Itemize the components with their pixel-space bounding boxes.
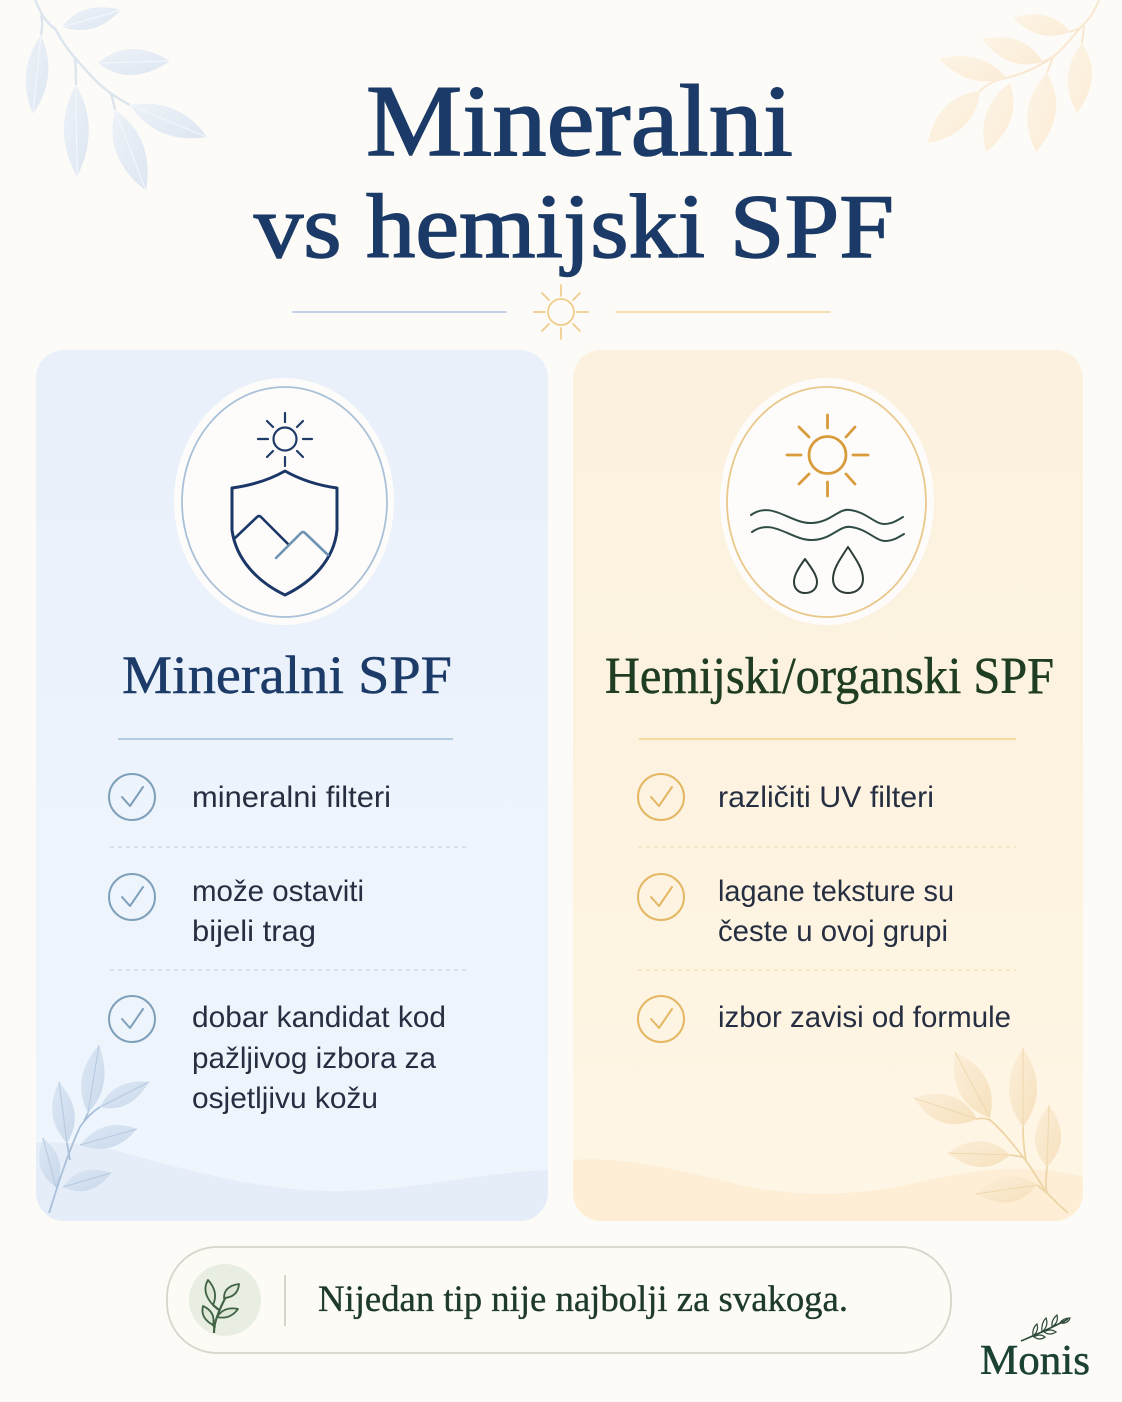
- panel background: [573, 350, 1083, 1221]
- heading rule: [639, 738, 1016, 740]
- panel background: [36, 350, 548, 1221]
- callout: bottom message: [167, 1247, 951, 1353]
- logo: Monis: [980, 1315, 1090, 1384]
- item: osjetljiva koža: [109, 996, 446, 1115]
- item: mineralni filteri: mineralni filteri: [192, 781, 391, 814]
- item: izbor zavisi od formule: [638, 996, 1011, 1042]
- item: mineralni filteri: [109, 774, 391, 820]
- item: osjetljiva koža: pažljivog izbora za: [192, 1042, 436, 1075]
- panel wave: [573, 1159, 1083, 1221]
- title: Mineralni: [366, 65, 793, 178]
- item: lagane teksture: česte u ovoj grupi: [718, 915, 948, 948]
- decorative sprig: top left: [26, 0, 207, 191]
- icon: green sprig: [189, 1264, 261, 1336]
- decorative sprig: panel left: [39, 1045, 149, 1213]
- item: izbor zavisi od formule: izbor zavisi od formule: [718, 1001, 1011, 1034]
- heading: Hemijski/organski SPF: [605, 648, 1054, 705]
- item: različiti UV filteri: [638, 774, 934, 820]
- title: [254, 65, 894, 277]
- heading rule: [118, 738, 453, 740]
- item: bijeli trag: bijeli trag: [192, 915, 316, 948]
- heading: Mineralni SPF: [122, 645, 452, 705]
- item: lagane teksture: lagane teksture su: [718, 875, 954, 908]
- logo text: Monis: [980, 1338, 1090, 1384]
- title divider with sun: [293, 285, 830, 339]
- title: vs hemijski SPF: [254, 176, 894, 277]
- panel: mineralni SPF: [36, 350, 548, 1221]
- panel wave: [36, 1143, 548, 1221]
- decorative sprig: top right: [928, 0, 1099, 152]
- icon: sun, waves and drops: [720, 378, 934, 625]
- item: osjetljiva koža: dobar kandidat kod: [192, 1001, 446, 1034]
- item: različiti UV filteri: različiti UV filteri: [718, 781, 934, 814]
- callout text: Nijedan tip nije najbolji za svakoga.: [318, 1279, 848, 1320]
- item: bijeli trag: [109, 874, 364, 948]
- icon: shield with sun: [174, 378, 394, 625]
- item: lagane teksture: [638, 874, 954, 948]
- decorative sprig: panel right: [914, 1048, 1068, 1213]
- panel: hemijski/organski SPF: [573, 350, 1083, 1221]
- logo sprig: [1021, 1315, 1070, 1341]
- item: osjetljiva koža: osjetljivu kožu: [192, 1082, 378, 1115]
- item: bijeli trag: može ostaviti: [192, 875, 364, 908]
